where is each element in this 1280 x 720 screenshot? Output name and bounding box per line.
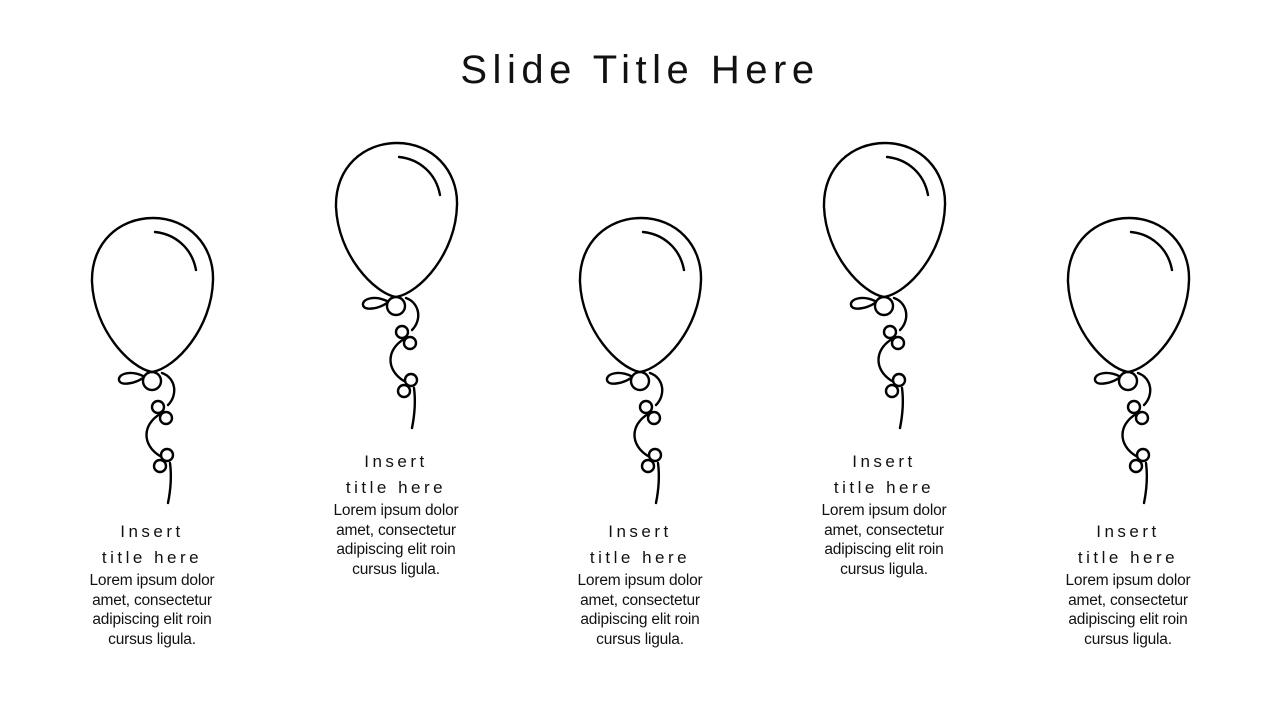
text block 2: title here [346,478,446,497]
text block 2: adipiscing elit roin [336,541,456,558]
balloon 4 [824,143,945,428]
text block 5 [1066,522,1190,648]
text block 3: Lorem ipsum dolor [578,572,702,589]
balloon 1 [92,218,213,503]
text block 1: Insert [120,522,184,541]
text block 4: amet, consectetur [824,522,944,538]
title: Slide Title Here [460,48,820,92]
text block 3: amet, consectetur [580,592,700,608]
text block 5: title here [1078,548,1178,567]
text block 3: cursus ligula. [596,630,684,648]
text block 1: amet, consectetur [92,592,212,608]
text block 3: title here [590,548,690,567]
text block 5: Insert [1096,522,1160,541]
text block 5: cursus ligula. [1084,630,1172,648]
text block 5: Lorem ipsum dolor [1066,572,1190,589]
text block 4: adipiscing elit roin [824,541,944,558]
text block 2 [334,452,458,578]
text block 3 [578,522,702,648]
text block 5: amet, consectetur [1068,592,1188,608]
text block 2: cursus ligula. [352,560,440,578]
balloon 3 [580,218,701,503]
text block 1: title here [102,548,202,567]
text block 2: amet, consectetur [336,522,456,538]
text block 4: Insert [852,452,916,471]
text block 1 [90,522,214,648]
text block 1: Lorem ipsum dolor [90,572,214,589]
text block 4: Lorem ipsum dolor [822,502,946,519]
text block 3: adipiscing elit roin [580,611,700,628]
text block 4: cursus ligula. [840,560,928,578]
text block 3: Insert [608,522,672,541]
balloon 5 [1068,218,1189,503]
balloon 2 [336,143,457,428]
text block 2: Insert [364,452,428,471]
text block 4 [822,452,946,578]
text block 4: title here [834,478,934,497]
text block 1: cursus ligula. [108,630,196,648]
text block 5: adipiscing elit roin [1068,611,1188,628]
text block 1: adipiscing elit roin [92,611,212,628]
text block 2: Lorem ipsum dolor [334,502,458,519]
